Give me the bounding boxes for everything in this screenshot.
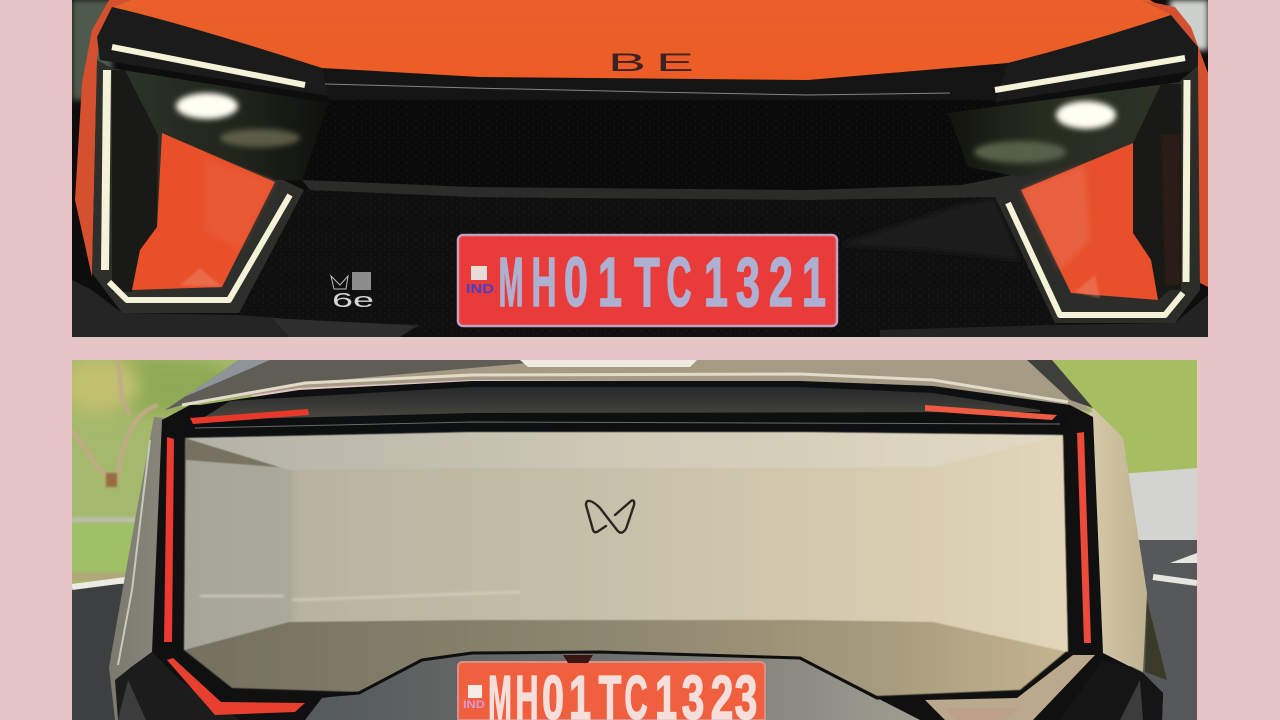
scenery right (1040, 360, 1197, 720)
front licence plate: IND (466, 281, 494, 296)
brow right (985, 15, 1198, 102)
vent right (1120, 680, 1143, 720)
scenery left (60, 355, 252, 585)
lower plate recess (305, 652, 920, 720)
headlamp right (948, 82, 1181, 177)
tail light lower left (167, 658, 305, 715)
rear licence plate (458, 655, 765, 720)
headlamp left (110, 68, 329, 180)
surround right (995, 66, 1200, 323)
orange intake right (1021, 143, 1158, 300)
Mahindra logo (586, 500, 634, 533)
tail light pillar left (164, 437, 174, 642)
body side right (1141, 0, 1208, 287)
column left (112, 70, 158, 292)
lower trim left (72, 280, 420, 337)
BE badge (612, 54, 692, 71)
front licence plate: H (531, 243, 557, 321)
BE badge: B (608, 49, 646, 77)
lower right light trim (925, 655, 1095, 720)
DRL right (995, 58, 1187, 315)
lower body black right (1142, 672, 1163, 718)
front licence plate: M (498, 244, 524, 322)
roof (165, 360, 1093, 412)
tail light top right (925, 405, 1057, 420)
front licence plate: 1 (598, 243, 622, 322)
BE badge: E (656, 49, 694, 77)
rear licence plate: IND (463, 699, 485, 711)
lamp reflections left (176, 93, 300, 147)
panel: front view photo (72, 0, 1208, 337)
tail light top left (190, 409, 309, 424)
hood (112, 0, 1175, 85)
grille strip (302, 167, 1060, 200)
orange intake left (132, 133, 275, 290)
front licence plate: 1 (704, 243, 728, 322)
tailgate panel (184, 432, 1068, 696)
vent left (118, 680, 146, 720)
lamp reflections right (974, 101, 1116, 163)
6e QR badge: 6e (332, 290, 374, 312)
tail light pillar right (1077, 432, 1091, 643)
lower bumper (239, 190, 1060, 337)
body side left (75, 0, 130, 277)
front licence plate: C (666, 243, 692, 321)
lower trim right (880, 295, 1208, 337)
panel: rear view photo (60, 355, 1197, 720)
lower body grey left (115, 652, 240, 720)
car body left side (109, 417, 166, 720)
6e QR badge (330, 272, 372, 307)
front licence plate (458, 235, 837, 326)
brow left (97, 7, 329, 96)
front licence plate: 1 (802, 243, 826, 322)
rear band (200, 381, 1070, 405)
front licence plate: T (634, 244, 660, 322)
grille (354, 100, 995, 106)
front licence plate: 2 (769, 243, 793, 322)
road left (72, 584, 124, 720)
car body right side (1085, 408, 1147, 672)
front licence plate: 0 (564, 243, 588, 322)
brow centre (322, 63, 1008, 85)
surround left (92, 60, 304, 313)
car dark base (118, 405, 1163, 720)
roof spoiler highlight (520, 360, 697, 367)
DRL left (105, 47, 305, 300)
column right (1133, 84, 1181, 300)
front licence plate: 3 (736, 243, 760, 322)
